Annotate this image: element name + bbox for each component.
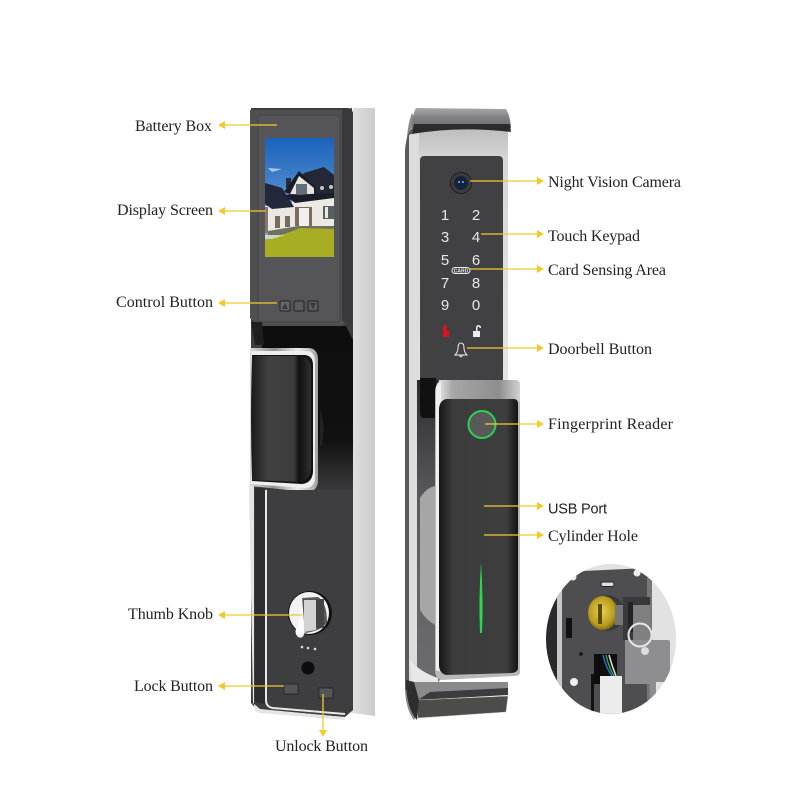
keypad digits: 2: [472, 207, 480, 224]
lock button: [284, 684, 298, 694]
display screen photo: [265, 138, 334, 257]
grip handle: [435, 380, 520, 680]
keypad digits: 0: [472, 297, 480, 314]
callout: USB Port: USB Port: [548, 502, 607, 518]
keypad digits: 9: [441, 297, 449, 314]
handle pull: [250, 348, 324, 492]
lower rear plate: [417, 380, 439, 680]
callout: Card Sensing Area: Card Sensing Area: [548, 262, 666, 279]
silver side edge: [346, 108, 375, 716]
rear plate: [405, 113, 508, 720]
card sensing icon: CARD: [454, 268, 469, 274]
callout: USB Port: [484, 502, 607, 518]
lock: front panel with screen: [249, 108, 375, 720]
lower faceplate: [267, 490, 352, 712]
card sensing icon: [452, 268, 470, 274]
keypad digits: [441, 207, 480, 314]
keypad digits: 3: [441, 229, 449, 246]
callout: Battery Box: Battery Box: [135, 118, 212, 135]
keypad digits: 7: [441, 275, 449, 292]
keypad digits: 6: [472, 252, 480, 269]
callout: Display Screen: Display Screen: [117, 202, 213, 219]
keypad panel: [420, 156, 503, 380]
dark lower body behind handle: [252, 326, 353, 490]
callout: Cylinder Hole: Cylinder Hole: [548, 528, 638, 545]
callout: Lock Button: Lock Button: [134, 678, 213, 695]
green indicator bar: [479, 562, 483, 633]
callout: Touch Keypad: Touch Keypad: [548, 228, 640, 245]
keyhole sensor: [302, 662, 314, 674]
foot of keypad side: [406, 680, 508, 720]
keypad digits: 4: [472, 229, 480, 246]
callout: Fingerprint Reader: Fingerprint Reader: [548, 416, 674, 433]
callout: Doorbell Button: Doorbell Button: [548, 341, 652, 358]
callout: Thumb Knob: Thumb Knob: [128, 606, 213, 623]
callout: Unlock Button: Unlock Button: [275, 738, 368, 755]
lock: keypad side: [405, 108, 511, 720]
inset: cylinder and key: [546, 564, 676, 714]
keypad digits: 5: [441, 252, 449, 269]
open lock icon: [473, 325, 481, 337]
keypad digits: 8: [472, 275, 480, 292]
callout: Night Vision Camera: Night Vision Camera: [548, 174, 681, 191]
callout: Control Button: Control Button: [116, 294, 213, 311]
unlock button: [319, 688, 333, 698]
thumb knob: [288, 591, 332, 650]
silver inner trim line: [266, 490, 345, 714]
control buttons: [280, 301, 318, 311]
fingerprint reader ring: [468, 411, 496, 438]
callout: Unlock Button: [275, 694, 368, 755]
battery box and screen panel: [250, 108, 352, 330]
night vision camera: [450, 172, 472, 194]
keypad digits: 1: [441, 207, 449, 224]
red lock icon: [443, 325, 449, 337]
dark faceplate: [251, 108, 353, 717]
top cap: [412, 108, 511, 129]
doorbell icon: [455, 343, 467, 357]
